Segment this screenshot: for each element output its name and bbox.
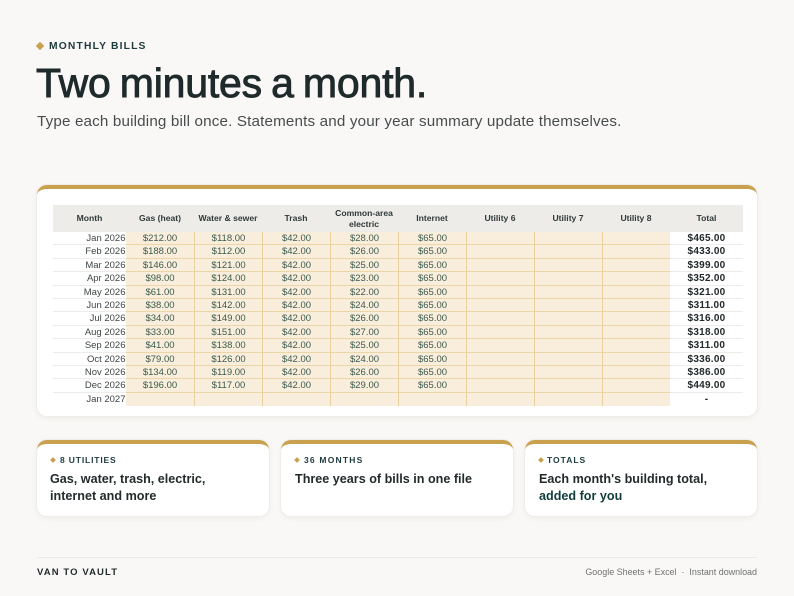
text: totals description — [539, 472, 707, 502]
spreadsheet table: $188.00 — [143, 246, 177, 257]
spreadsheet table: $449.00 — [688, 380, 725, 391]
panel: 8 utilities — [37, 440, 269, 516]
spreadsheet table: $134.00 — [143, 367, 177, 378]
spreadsheet table: $25.00 — [350, 260, 379, 271]
panel: spreadsheet card — [37, 185, 757, 416]
spreadsheet table: $65.00 — [418, 380, 447, 391]
spreadsheet table: Gas (heat) — [139, 213, 181, 223]
spreadsheet table: $151.00 — [211, 327, 246, 338]
spreadsheet table: Feb 2026 — [85, 246, 126, 257]
spreadsheet table: Apr 2026 — [87, 273, 126, 284]
text: utilities description: Gas, water, trash, electric, — [50, 472, 205, 486]
spreadsheet table: Oct 2026 — [87, 354, 126, 365]
spreadsheet table: Common-area — [335, 208, 393, 218]
spreadsheet table: $465.00 — [688, 233, 725, 244]
spreadsheet table: $112.00 — [212, 246, 245, 257]
spreadsheet table: $121.00 — [211, 260, 246, 271]
spreadsheet table: $212.00 — [143, 233, 177, 244]
spreadsheet table: $146.00 — [143, 260, 177, 271]
subtitle: Type each building bill once. Statements and your year summary update themselves. — [37, 113, 622, 130]
spreadsheet table: Trash — [285, 213, 307, 223]
label: 8 utilities: 8 UTILITIES — [60, 455, 117, 465]
text: totals description: Each month's building total, — [539, 472, 707, 486]
spreadsheet table: $98.00 — [145, 273, 175, 284]
spreadsheet table: $42.00 — [282, 287, 311, 298]
spreadsheet table: $33.00 — [145, 327, 175, 338]
spreadsheet table: $352.00 — [688, 273, 725, 284]
spreadsheet table: $386.00 — [688, 367, 725, 378]
spreadsheet table: $119.00 — [212, 367, 245, 378]
spreadsheet table: $42.00 — [282, 380, 311, 391]
spreadsheet table: electric — [349, 218, 379, 228]
label: totals: TOTALS — [547, 455, 586, 465]
spreadsheet table: Utility 8 — [620, 213, 652, 223]
spreadsheet table: $42.00 — [282, 260, 311, 271]
spreadsheet table: $142.00 — [211, 300, 246, 311]
spreadsheet table: $138.00 — [211, 340, 246, 351]
spreadsheet table: $24.00 — [350, 354, 379, 365]
spreadsheet table: Jan 2027 — [86, 394, 126, 405]
spreadsheet table: $126.00 — [211, 354, 246, 365]
spreadsheet table: $321.00 — [688, 287, 725, 298]
spreadsheet table: $42.00 — [282, 327, 311, 338]
spreadsheet table: Nov 2026 — [85, 367, 126, 378]
panel: totals — [525, 440, 757, 516]
spreadsheet table: $65.00 — [418, 327, 447, 338]
spreadsheet table: Month — [77, 213, 102, 223]
panel: 36 months — [281, 440, 513, 516]
spreadsheet table: $38.00 — [145, 300, 175, 311]
spreadsheet table: $24.00 — [350, 300, 379, 311]
spreadsheet table: $42.00 — [282, 313, 311, 324]
spreadsheet table: $65.00 — [418, 246, 447, 257]
spreadsheet table: $26.00 — [350, 246, 379, 257]
icon: eyebrow diamond — [36, 42, 44, 50]
text: utilities description — [50, 472, 205, 502]
spreadsheet table: Utility 6 — [484, 213, 516, 223]
spreadsheet table: $118.00 — [212, 233, 245, 244]
text: totals description: added for you — [539, 488, 622, 502]
label: 36 months: 36 MONTHS — [304, 455, 363, 465]
spreadsheet table: $433.00 — [688, 246, 725, 257]
spreadsheet table: $311.00 — [688, 340, 725, 351]
spreadsheet table: $336.00 — [688, 354, 725, 365]
spreadsheet table: $65.00 — [418, 340, 447, 351]
spreadsheet table — [53, 205, 743, 406]
spreadsheet table: $28.00 — [350, 233, 379, 244]
eyebrow label: MONTHLY BILLS — [49, 41, 147, 52]
spreadsheet table: $196.00 — [143, 380, 177, 391]
spreadsheet table: $25.00 — [350, 340, 379, 351]
spreadsheet table: May 2026 — [84, 287, 126, 298]
spreadsheet table: $42.00 — [282, 273, 311, 284]
spreadsheet table: Water & sewer — [199, 213, 257, 223]
spreadsheet table: $42.00 — [282, 300, 311, 311]
spreadsheet table: $65.00 — [418, 354, 447, 365]
spreadsheet table: $124.00 — [211, 273, 246, 284]
spreadsheet table: $65.00 — [418, 260, 447, 271]
icon: diamond — [538, 457, 544, 463]
spreadsheet table: $65.00 — [418, 273, 447, 284]
spreadsheet table: $42.00 — [282, 246, 311, 257]
footer brand: VAN TO VAULT — [37, 567, 118, 578]
spreadsheet table: Internet — [416, 213, 448, 223]
spreadsheet table: $42.00 — [282, 340, 311, 351]
spreadsheet table: $22.00 — [350, 287, 379, 298]
spreadsheet table: $42.00 — [282, 354, 311, 365]
icon: diamond — [50, 457, 56, 463]
spreadsheet table: - — [705, 394, 708, 405]
spreadsheet table: $131.00 — [211, 287, 246, 298]
spreadsheet table: $23.00 — [350, 273, 379, 284]
spreadsheet table: $41.00 — [145, 340, 175, 351]
spreadsheet table: Jan 2026 — [86, 233, 126, 244]
spreadsheet table: $29.00 — [350, 380, 379, 391]
spreadsheet table: $27.00 — [350, 327, 379, 338]
spreadsheet table: $399.00 — [688, 260, 725, 271]
spreadsheet table: $65.00 — [418, 287, 447, 298]
spreadsheet table: Aug 2026 — [85, 327, 126, 338]
spreadsheet table: $79.00 — [145, 354, 175, 365]
spreadsheet table: Total — [697, 213, 716, 223]
spreadsheet table: $149.00 — [211, 313, 246, 324]
text: months description: Three years of bills in one file — [295, 472, 472, 486]
spreadsheet table: $311.00 — [688, 300, 725, 311]
spreadsheet table: $26.00 — [350, 313, 379, 324]
spreadsheet table: Jun 2026 — [86, 300, 126, 311]
spreadsheet table: $65.00 — [418, 313, 447, 324]
spreadsheet table: $318.00 — [688, 327, 725, 338]
icon: diamond — [294, 457, 300, 463]
spreadsheet table: $61.00 — [145, 287, 175, 298]
spreadsheet table: Mar 2026 — [85, 260, 126, 271]
spreadsheet table: Dec 2026 — [85, 380, 126, 391]
text: utilities description: internet and more — [50, 488, 156, 502]
spreadsheet table: $42.00 — [282, 367, 311, 378]
spreadsheet table: $26.00 — [350, 367, 379, 378]
spreadsheet table: $316.00 — [688, 313, 725, 324]
title: Two minutes a month. — [36, 60, 427, 106]
spreadsheet table: Utility 7 — [552, 213, 584, 223]
spreadsheet table: Sep 2026 — [85, 340, 126, 351]
spreadsheet table: $34.00 — [145, 313, 175, 324]
spreadsheet table: $65.00 — [418, 367, 447, 378]
spreadsheet table: $65.00 — [418, 300, 447, 311]
spreadsheet table: Jul 2026 — [90, 313, 126, 324]
spreadsheet table: $42.00 — [282, 233, 311, 244]
spreadsheet table: $65.00 — [418, 233, 447, 244]
footer note: Google Sheets + Excel · Instant download — [585, 567, 757, 577]
spreadsheet table: $117.00 — [212, 380, 245, 391]
